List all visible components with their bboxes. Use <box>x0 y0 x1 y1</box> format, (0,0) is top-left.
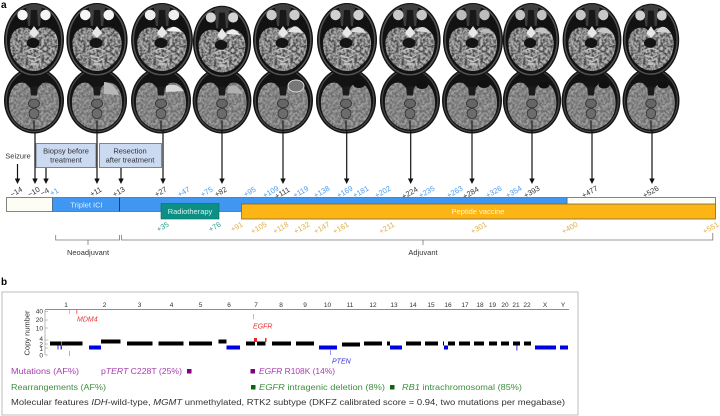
seizure label: Seizure <box>5 152 31 160</box>
day labels above the timeline <box>8 184 660 201</box>
FLAIR scan 7 <box>380 68 440 134</box>
radiotherapy bar <box>161 204 219 219</box>
panel label b: b <box>1 277 7 288</box>
copy number axis: 40 <box>36 308 43 316</box>
chromosome labels: 8 <box>279 302 283 309</box>
gene label PTEN: PTEN <box>332 358 352 366</box>
chromosome labels: Y <box>561 302 566 309</box>
chromosome labels: 20 <box>501 302 509 309</box>
day labels above the timeline: +393 <box>522 184 541 200</box>
day labels above the timeline: +82 <box>213 185 229 199</box>
FLAIR scan 6 <box>316 68 376 134</box>
copy-number segments: loss <box>58 346 568 356</box>
chromosome labels: 11 <box>347 302 354 309</box>
chromosome labels: 10 <box>324 302 331 309</box>
day labels above the timeline: +75 <box>199 185 215 199</box>
day labels above the timeline: +1 <box>48 186 60 198</box>
chromosome labels: 6 <box>227 302 231 309</box>
copy number axis: 20 <box>36 317 43 324</box>
FLAIR scan 5 <box>253 68 313 134</box>
day labels above the timeline: +47 <box>176 185 192 199</box>
T2 scan 8 <box>443 3 503 77</box>
day labels above the timeline: +13 <box>111 185 127 199</box>
triplet ICI bar <box>52 198 567 212</box>
day labels above the timeline: +95 <box>242 185 258 199</box>
gene label EGFR: EGFR <box>253 324 272 330</box>
chromosome labels: 17 <box>461 302 469 309</box>
callout: resection after treatment <box>100 144 162 168</box>
day labels above the timeline: +224 <box>400 185 419 201</box>
peptide vaccine bar: Peptide vaccine <box>452 207 504 216</box>
callout: resection after treatment: Resection <box>113 146 147 156</box>
chromosome labels: 12 <box>369 302 377 309</box>
mutations row: Mutations (AF%) <box>11 367 79 376</box>
callout: biopsy before treatment: Biopsy before <box>43 146 89 156</box>
copy number axis: 4 <box>39 336 43 343</box>
day labels above the timeline: +119 <box>291 184 310 200</box>
day labels below the timeline: +551 <box>701 220 720 236</box>
T2 scan 9 <box>503 3 559 77</box>
bracket: neoadjuvant <box>56 235 120 257</box>
copy number axis: Copy number <box>22 310 32 356</box>
day labels below the timeline: +105 <box>249 220 268 236</box>
callout: biopsy before treatment: treatment <box>50 156 83 164</box>
chromosome labels: 9 <box>303 302 307 309</box>
chromosome labels: X <box>543 302 548 309</box>
copy number axis: 2 <box>39 342 43 348</box>
day labels above the timeline: +11 <box>88 185 103 199</box>
mutations row: EGFR R108K (14%) <box>259 367 335 376</box>
FLAIR scan 3 <box>131 68 191 134</box>
peptide vaccine bar <box>242 204 716 219</box>
panel label a: a <box>1 0 7 11</box>
chromosome labels <box>64 302 566 309</box>
chromosome labels: 18 <box>476 302 484 309</box>
day labels below the timeline: +211 <box>377 220 396 236</box>
rearrangements row <box>11 383 522 392</box>
rearrangements row: RB1 intrachromosomal (85%) <box>402 383 522 392</box>
day labels below the timeline: +400 <box>560 220 579 236</box>
copy-number segments: neutral and gain <box>50 340 531 346</box>
MRI row: T2 scans <box>4 3 679 78</box>
arrows from events and scans to the timeline <box>18 130 652 181</box>
chromosome labels: 1 <box>64 302 68 309</box>
rearrangements row: EGFR intragenic deletion (8%) <box>259 383 385 392</box>
chromosome labels: 19 <box>489 302 496 309</box>
day labels below the timeline: +147 <box>312 220 331 236</box>
T2 scan 7 <box>379 3 441 77</box>
day labels above the timeline: +284 <box>461 185 480 201</box>
FLAIR scan 8 <box>442 68 502 134</box>
day labels above the timeline: +27 <box>153 185 169 199</box>
day labels above the timeline: −14 <box>8 185 24 199</box>
day labels above the timeline: +111 <box>273 185 291 201</box>
bracket: neoadjuvant: Neoadjuvant <box>67 248 110 257</box>
day labels below the timeline: +35 <box>155 220 171 234</box>
timeline bar <box>6 198 716 219</box>
chromosome labels: 13 <box>390 302 398 309</box>
FLAIR scan 4 <box>193 68 251 134</box>
mutations row <box>11 367 335 376</box>
day labels below the timeline: +91 <box>229 220 245 234</box>
day labels above the timeline: +202 <box>373 184 392 200</box>
chromosome labels: 16 <box>444 302 452 309</box>
T2 scan 5 <box>253 3 313 77</box>
chromosome labels: 5 <box>199 302 203 309</box>
FLAIR scan 1 <box>4 68 64 134</box>
day labels above the timeline: +326 <box>484 184 503 200</box>
day labels above the timeline: +526 <box>641 184 660 200</box>
chromosome labels: 2 <box>103 302 107 309</box>
copy number axis: 0 <box>39 352 43 360</box>
day labels above the timeline: +169 <box>335 184 354 200</box>
T2 scan 11 <box>623 4 679 76</box>
day labels above the timeline: +263 <box>445 184 464 200</box>
panel b: genomic profile box <box>2 292 578 415</box>
chromosome labels: 4 <box>170 302 174 309</box>
rearrangements row: Rearrangements (AF%) <box>11 383 106 392</box>
copy number axis: 10 <box>36 326 43 332</box>
chromosome labels: 3 <box>138 302 142 309</box>
T2 scan 3 <box>131 3 193 77</box>
day labels below the timeline: +118 <box>271 220 290 236</box>
radiotherapy bar: Radiotherapy <box>168 207 213 216</box>
FLAIR scan 2 <box>67 68 127 134</box>
callout: resection after treatment: after treatment <box>106 156 155 164</box>
bracket: adjuvant: Adjuvant <box>408 248 439 257</box>
MRI row: FLAIR scans <box>4 68 680 134</box>
day labels above the timeline: +235 <box>417 184 436 200</box>
T2 scan 6 <box>317 3 377 77</box>
day labels below the timeline <box>155 220 720 236</box>
day labels below the timeline: +132 <box>292 220 311 236</box>
FLAIR scan 11 <box>622 68 680 134</box>
copy number axis <box>22 308 48 360</box>
molecular features row: Molecular features IDH -wild-type, MGMT unmethylated, RTK2 subtype (DKFZ calibrated score = 0.94, two mutations per megabase) <box>11 398 565 407</box>
chromosome labels: 14 <box>409 302 417 309</box>
day labels above the timeline: +354 <box>504 184 523 200</box>
day labels above the timeline: +109 <box>261 184 280 200</box>
day labels below the timeline: +301 <box>469 220 488 236</box>
day labels below the timeline: +76 <box>207 220 223 234</box>
T2 scan 2 <box>66 3 128 77</box>
triplet ICI bar: Triplet ICI <box>70 200 103 210</box>
gene label MDM4: MDM4 <box>77 316 98 324</box>
chromosome labels: 15 <box>427 302 435 309</box>
FLAIR scan 9 <box>503 68 561 134</box>
bracket: adjuvant <box>122 233 713 257</box>
chromosome labels: 7 <box>254 302 258 309</box>
day labels below the timeline: +161 <box>331 220 350 236</box>
chromosome labels: 21 <box>512 302 520 309</box>
day labels above the timeline: +138 <box>312 184 331 200</box>
day labels above the timeline: −4 <box>39 186 51 198</box>
T2 scan 10 <box>563 3 621 77</box>
amplification marks <box>69 310 266 342</box>
chromosome labels: 22 <box>523 302 531 309</box>
mutations row: pTERT C228T (25%) <box>101 367 182 376</box>
FLAIR scan 10 <box>562 68 620 134</box>
pre-treatment segment <box>6 198 52 212</box>
T2 scan 4 <box>193 6 251 78</box>
day labels above the timeline: −10 <box>26 185 42 199</box>
day labels above the timeline: +181 <box>351 184 370 200</box>
follow-up segment <box>567 198 716 204</box>
day labels above the timeline: +477 <box>580 184 599 200</box>
T2 scan 1 <box>4 3 64 77</box>
callout: biopsy before treatment <box>36 144 96 168</box>
copy number axis: 1 <box>39 346 43 353</box>
